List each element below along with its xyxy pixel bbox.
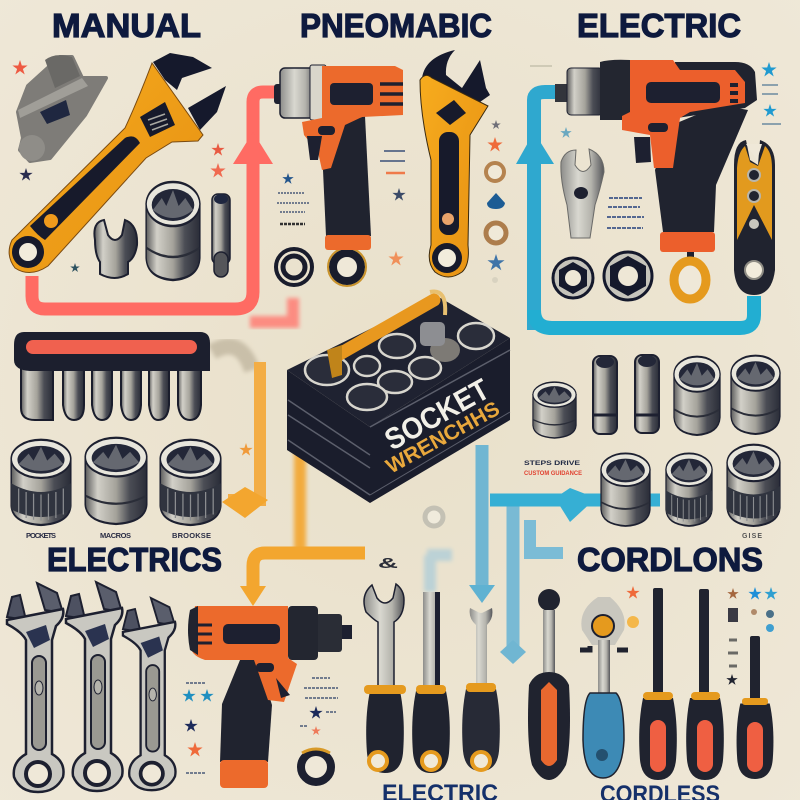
icon: large socket bbox=[146, 182, 200, 280]
screwdriver 5 bbox=[639, 588, 677, 780]
sockets row: right top bbox=[533, 355, 780, 438]
bit rack bbox=[14, 332, 210, 420]
center toolbox: socket wrenches bbox=[287, 291, 510, 503]
wrenches: three chrome bbox=[7, 582, 176, 792]
hex nuts bbox=[553, 252, 652, 300]
heading: ELECTRICS: ELECTRICS bbox=[47, 541, 222, 578]
screwdriver 7 bbox=[737, 636, 773, 779]
sockets row: right bottom: GISE bbox=[742, 533, 762, 540]
icon: ratchet handle bbox=[734, 140, 775, 295]
washer bbox=[425, 508, 443, 526]
sockets row: left bbox=[11, 438, 221, 540]
center toolbox: socket wrenches: WRENCHHS bbox=[382, 397, 504, 478]
ampersand: & bbox=[378, 555, 398, 572]
note: red label: CUSTOM GUIDANCE bbox=[524, 470, 583, 477]
small stars bbox=[12, 60, 406, 272]
sockets row: left: POCKETS bbox=[26, 531, 56, 540]
small annotation lines bbox=[277, 151, 405, 224]
handle bbox=[327, 291, 445, 378]
rings and stars beside wrench bbox=[486, 120, 506, 283]
heading: CORDLONS: CORDLONS bbox=[577, 541, 763, 578]
screwdriver 2 bbox=[462, 608, 500, 771]
arrow: blue from electric bbox=[516, 92, 754, 330]
icon: orange drill bottom bbox=[188, 606, 352, 788]
note: red label: STEPS DRIVE bbox=[524, 460, 581, 467]
icon: orange adjustable wrench bbox=[9, 53, 226, 273]
icon: pneumatic drill bbox=[274, 65, 403, 250]
icon: electric drill bbox=[555, 60, 757, 299]
rings below pneumatic drill bbox=[276, 248, 366, 286]
cluster of small icons bbox=[726, 587, 778, 685]
icon: grey wrench fragment bbox=[18, 55, 106, 161]
icon: open-end socket bbox=[94, 220, 137, 278]
screwdriver 6 bbox=[686, 589, 724, 780]
sockets row: left: BROOKSE bbox=[172, 531, 211, 540]
washer bottom bbox=[301, 749, 331, 782]
arrow: orange connectors bbox=[212, 283, 365, 606]
label: SOCKET bbox=[379, 373, 495, 457]
heading: PNEOMABIC: PNEOMABIC bbox=[300, 7, 492, 44]
heading: MANUAL: MANUAL bbox=[52, 7, 201, 44]
socket holes bbox=[305, 323, 494, 410]
note: red label bbox=[524, 460, 583, 477]
arrow: red from manual to pneumatic bbox=[32, 92, 293, 322]
sockets row: left: MACROS bbox=[100, 531, 131, 540]
icon: chrome spanner bbox=[561, 149, 604, 238]
sockets row: right bottom bbox=[601, 445, 780, 540]
icon: socket bit bbox=[212, 194, 230, 277]
screwdriver 3 bbox=[528, 589, 570, 780]
blue star and notes bbox=[530, 62, 781, 228]
arrow: light blue connectors bbox=[427, 362, 660, 664]
stars beside bottom drill bbox=[182, 678, 338, 773]
screwdriver: spanner tip bbox=[364, 584, 406, 773]
screwdriver 4: ratchet bbox=[580, 586, 640, 778]
icon: orange wrench vertical bbox=[420, 50, 490, 277]
heading: ELECTRIC: ELECTRIC bbox=[577, 7, 741, 44]
screwdriver 1 bbox=[412, 592, 450, 773]
